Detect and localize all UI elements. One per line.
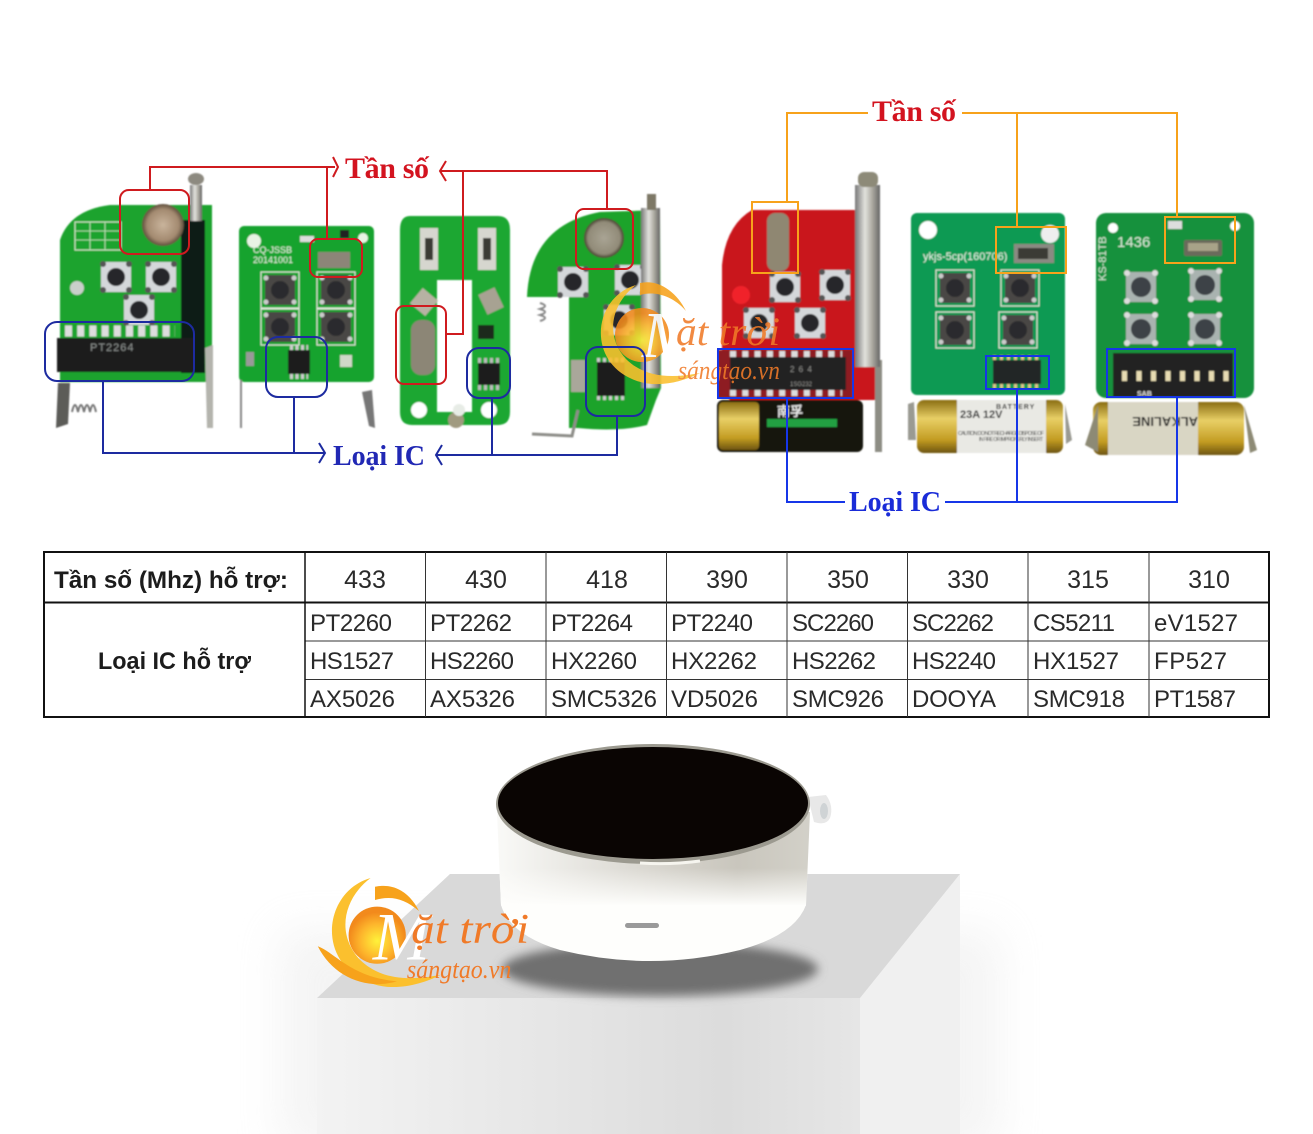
table row: frequency values: 430 (465, 566, 507, 594)
board 5: red PCB with black battery: 1SG232 (790, 382, 813, 388)
board 6: green PCB ykjs-5cp with gold battery: ykjs-5cp(160706) (923, 251, 1007, 263)
table rows: IC names: PT2264 (551, 610, 633, 637)
board 2: green PCB CQ-JSSB: 20141001 (253, 255, 293, 265)
watermark: top sun logo: ặt trời (676, 309, 780, 354)
board 1: green PCB PT2264: PT2264 (90, 342, 135, 354)
label: Tần số red: Tần số (345, 152, 430, 185)
board 4: curved green PCB with antenna (527, 194, 661, 436)
table row: frequency values: 310 (1188, 566, 1230, 594)
board 3: narrow green PCB (400, 216, 510, 428)
watermark: bottom sun logo: sángtạo.vn (407, 954, 511, 984)
table row: frequency values: 330 (947, 566, 989, 594)
table rows: IC names: eV1527 (1154, 610, 1238, 637)
board 2: green PCB CQ-JSSB (239, 226, 375, 428)
table rows: IC names: SC2260 (792, 610, 874, 637)
table rows: IC names: HS2260 (430, 648, 514, 675)
table rows: IC names (310, 610, 1238, 713)
table rows: IC names: CS5211 (1033, 610, 1115, 637)
label: Loại IC blue: Loại IC (849, 487, 941, 518)
table rows: IC names: HS2262 (792, 648, 876, 675)
board 7: green PCB KS-81TB with DIP switch: SAB (1137, 391, 1152, 398)
watermark: top sun logo (601, 282, 780, 385)
callout: navy IC connectors and boxes (45, 322, 645, 465)
board 6: green PCB ykjs-5cp with gold battery (908, 213, 1072, 453)
table rows: IC names: DOOYA (912, 686, 996, 713)
table rows: IC names: SMC926 (792, 686, 884, 713)
table rows: IC names: HX2262 (671, 648, 757, 675)
board 5: red PCB with black battery: 2 6 4 (790, 365, 813, 374)
table row: frequency values: 390 (706, 566, 748, 594)
board 7: green PCB KS-81TB with DIP switch: KS-81TB (1097, 236, 1109, 281)
board 1: green PCB PT2264 (56, 173, 213, 428)
watermark: top sun logo: M (641, 299, 701, 372)
product: round IR hub device (490, 744, 831, 996)
watermark: bottom sun logo: ặt trời (411, 907, 529, 953)
board 2: green PCB CQ-JSSB: CQ-JSSB (253, 245, 292, 255)
board 7: green PCB KS-81TB with DIP switch: 1436 (1117, 234, 1150, 251)
table rows: IC names: AX5026 (310, 686, 395, 713)
table row: frequency values: 433 (344, 566, 386, 594)
board 6: green PCB ykjs-5cp with gold battery: CAUTION: DO NOT RECHARGE DISPOSE OF (958, 431, 1045, 437)
board 6: green PCB ykjs-5cp with gold battery: BATTERY (996, 404, 1035, 411)
table rows: IC names: FP527 (1154, 648, 1227, 675)
board 7: green PCB KS-81TB with DIP switch (1085, 213, 1257, 455)
table row: frequency values (344, 566, 1230, 594)
panel: left remotes (56, 173, 661, 436)
table rows: IC names: AX5326 (430, 686, 515, 713)
label: Tần số orange side: Tần số (872, 95, 957, 128)
table rows: IC names: SMC5326 (551, 686, 657, 713)
table rows: IC names: SMC918 (1033, 686, 1125, 713)
board 6: green PCB ykjs-5cp with gold battery: IN FIRE OR IMPROPERLY INSERT (979, 437, 1043, 443)
board 6: green PCB ykjs-5cp with gold battery: 23A 12V (960, 409, 1003, 421)
table heading: IC types: Loại IC hỗ trợ (98, 647, 252, 675)
watermark: bottom sun logo: M (372, 898, 433, 974)
table row: frequency values: 418 (586, 566, 628, 594)
table rows: IC names: HS2240 (912, 648, 996, 675)
table: supported frequencies and ICs (44, 552, 1269, 717)
callout: blue IC connectors and boxes (718, 349, 1235, 502)
pedestal: white display stand (280, 874, 1000, 1134)
table rows: IC names: PT2240 (671, 610, 753, 637)
table heading: frequency: Tần số (Mhz) hỗ trợ: (54, 566, 288, 594)
label: Loại IC navy: Loại IC (333, 441, 425, 472)
panel: right remotes (717, 172, 1257, 455)
table rows: IC names: HX1527 (1033, 648, 1119, 675)
table rows: IC names: HS1527 (310, 648, 394, 675)
table rows: IC names: SC2262 (912, 610, 994, 637)
callout: orange frequency connectors and boxes (752, 113, 1235, 273)
board 5: red PCB with black battery (717, 172, 882, 452)
board 7: green PCB KS-81TB with DIP switch: ALKALINE (1132, 414, 1198, 429)
callout: red frequency connectors and boxes (120, 157, 633, 384)
table rows: IC names: PT2260 (310, 610, 392, 637)
board 5: red PCB with black battery: 南孚 (777, 404, 803, 419)
table rows: IC names: PT2262 (430, 610, 512, 637)
table rows: IC names: PT1587 (1154, 686, 1236, 713)
table row: frequency values: 350 (827, 566, 869, 594)
table rows: IC names: VD5026 (671, 686, 758, 713)
table row: frequency values: 315 (1067, 566, 1109, 594)
table rows: IC names: HX2260 (551, 648, 637, 675)
watermark: bottom sun logo (318, 878, 529, 987)
watermark: top sun logo: sángtạo.vn (678, 356, 780, 385)
